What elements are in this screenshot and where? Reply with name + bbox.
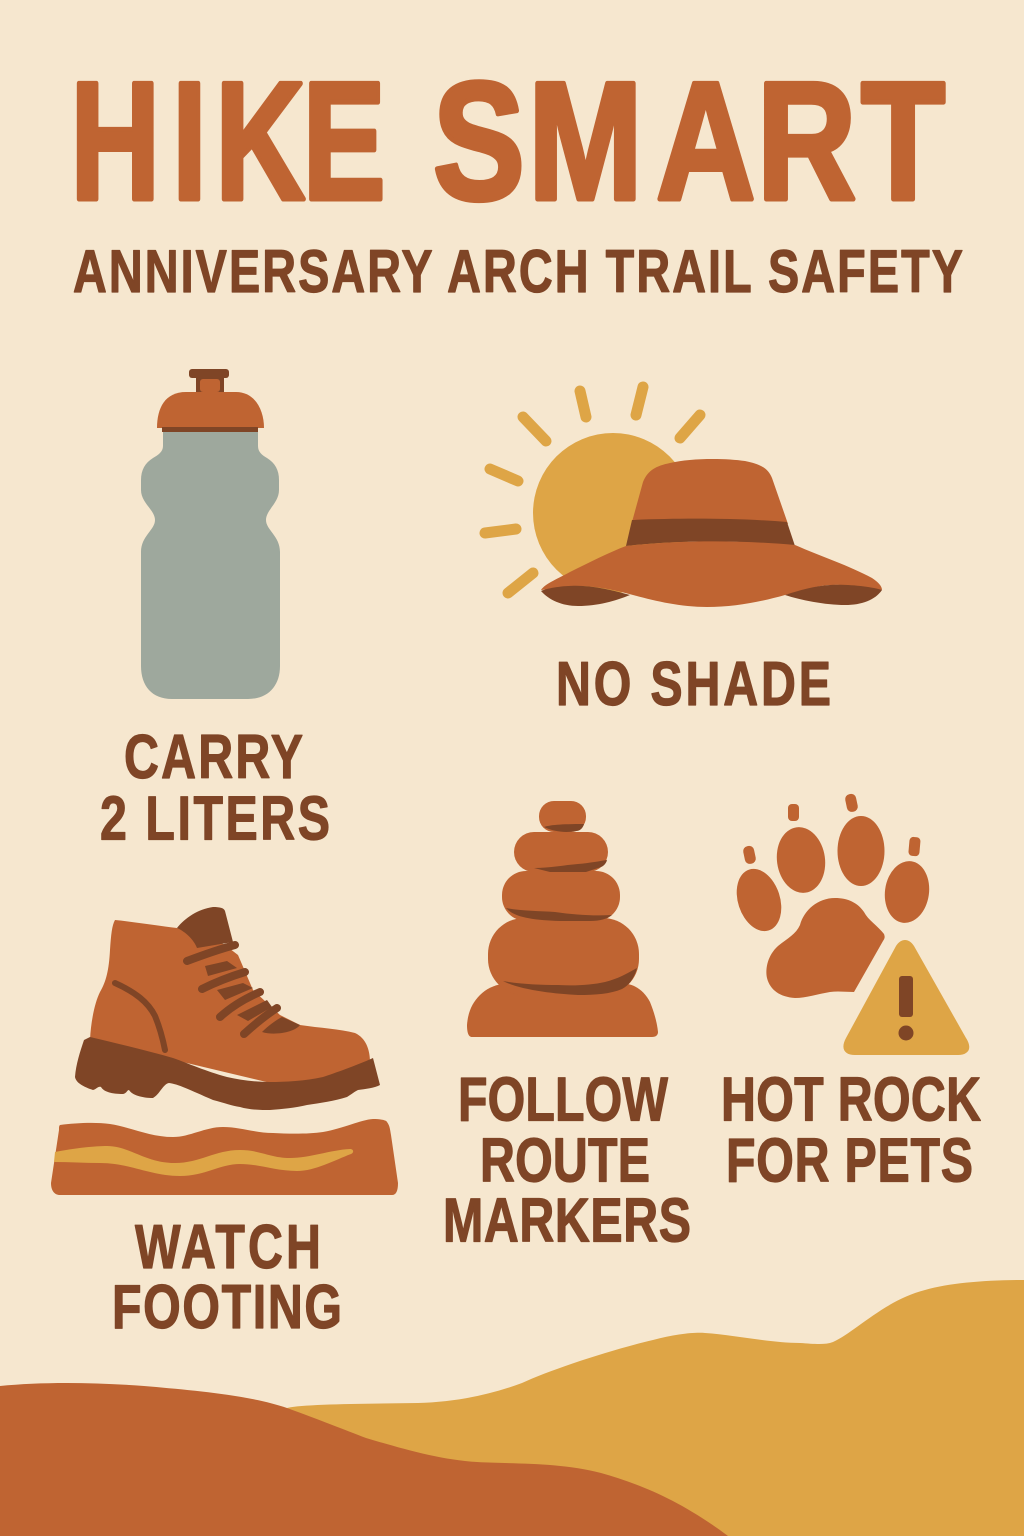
boot upper xyxy=(90,920,370,1090)
background: yellow hills xyxy=(287,1280,1024,1536)
label: follow route markers xyxy=(443,1065,691,1255)
label: carry 2 liters: 2 LITERS xyxy=(100,784,330,853)
label: follow route markers: FOLLOW xyxy=(458,1065,668,1134)
boot tongue xyxy=(177,907,233,948)
icon: boot xyxy=(75,907,380,1110)
icon: sun and hat xyxy=(485,387,882,607)
icon: paw print xyxy=(729,793,933,998)
icon: rocky ground xyxy=(51,1119,398,1195)
label: follow route markers: ROUTE xyxy=(480,1126,650,1195)
label: watch footing xyxy=(112,1212,342,1341)
icon: hat xyxy=(541,459,882,607)
label: carry 2 liters xyxy=(100,722,330,853)
boot sole xyxy=(75,1037,380,1110)
label: hot rock for pets: HOT ROCK xyxy=(721,1065,981,1134)
label: no shade: NO SHADE xyxy=(556,649,831,718)
label: carry 2 liters: CARRY xyxy=(124,722,303,791)
label: hot rock for pets xyxy=(721,1065,981,1195)
label: hot rock for pets: FOR PETS xyxy=(726,1126,973,1195)
bottle cap xyxy=(157,369,264,432)
title: HIKE xyxy=(70,48,386,235)
icon: water bottle xyxy=(141,369,280,699)
icon: sun xyxy=(485,387,700,593)
subtitle: ANNIVERSARY ARCH TRAIL SAFETY xyxy=(73,238,963,305)
background: orange hill xyxy=(0,1383,728,1536)
title xyxy=(70,47,945,235)
icon: rock cairn xyxy=(467,801,658,1037)
label: watch footing: WATCH xyxy=(135,1212,321,1281)
label: watch footing: FOOTING xyxy=(112,1272,342,1341)
boot laces xyxy=(187,945,277,1034)
label: follow route markers: MARKERS xyxy=(443,1186,691,1255)
bottle body xyxy=(141,432,280,699)
title: SMART xyxy=(433,47,945,235)
icon: warning triangle xyxy=(843,940,969,1055)
